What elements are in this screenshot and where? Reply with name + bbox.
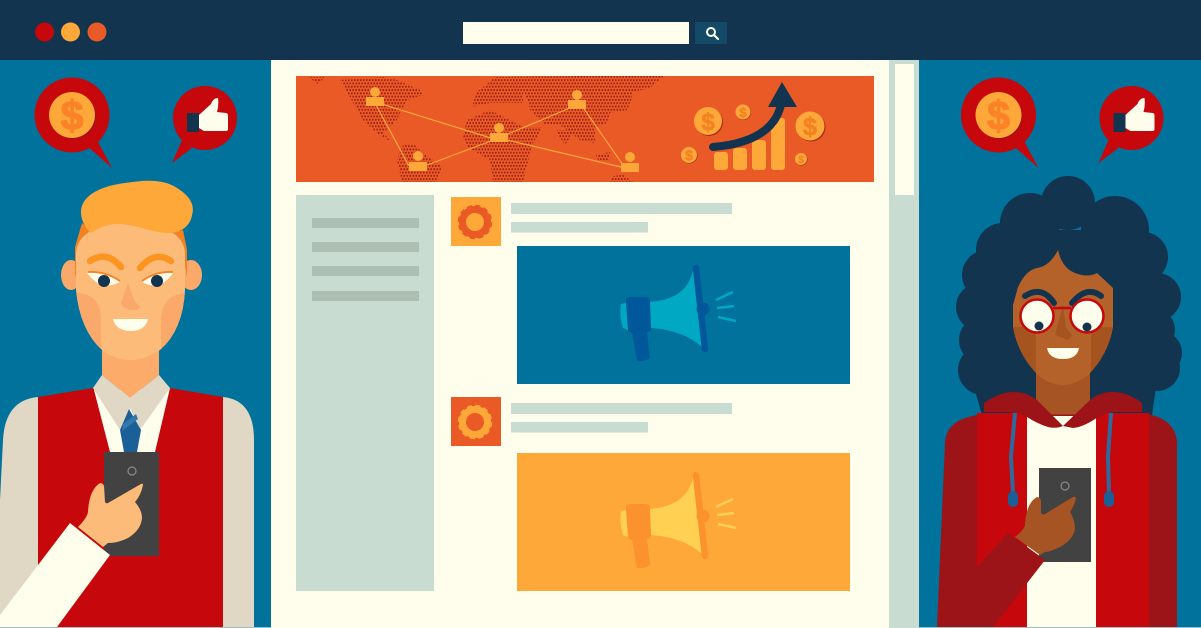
network people xyxy=(366,87,639,172)
white shirt front xyxy=(94,388,170,452)
banner: world network and growth xyxy=(296,75,874,182)
scrollbar xyxy=(889,60,919,628)
eyebrows xyxy=(1025,292,1101,303)
nose xyxy=(1055,305,1072,340)
dollar coins: $ xyxy=(701,109,715,136)
dollar bubble xyxy=(34,78,112,168)
dollar coins xyxy=(681,104,826,166)
post 1 image panel xyxy=(517,246,850,384)
dollar coins: $ xyxy=(685,147,693,163)
search field xyxy=(463,22,689,44)
neck xyxy=(102,345,159,398)
hand xyxy=(1015,497,1076,555)
growth bars xyxy=(714,118,785,170)
mouth xyxy=(113,319,148,331)
sidebar xyxy=(296,195,434,591)
dollar bubble xyxy=(961,78,1038,168)
dollar bubble: $ xyxy=(987,92,1010,138)
web page panel xyxy=(271,60,919,628)
dotted world map xyxy=(308,75,665,182)
nose xyxy=(121,283,140,310)
post 2 xyxy=(451,397,850,591)
window control dots xyxy=(35,22,106,42)
phone xyxy=(104,452,159,556)
drawstrings xyxy=(1008,413,1114,507)
woman character xyxy=(937,176,1182,627)
collar xyxy=(93,375,170,430)
ears xyxy=(61,260,202,290)
tie xyxy=(120,409,141,452)
hoodie body xyxy=(937,414,1177,627)
white t-shirt xyxy=(1027,416,1096,627)
mouth xyxy=(1047,348,1079,359)
browser top bar xyxy=(0,0,1201,60)
bottom edge line xyxy=(0,627,271,628)
post 2 image panel xyxy=(517,453,850,591)
glasses xyxy=(1020,300,1104,332)
dollar bubble: $ xyxy=(61,92,84,138)
sidebar menu lines xyxy=(312,218,419,301)
dollar coins: $ xyxy=(803,113,817,141)
side hair xyxy=(75,223,187,278)
search button xyxy=(695,22,727,44)
post 1 heading lines xyxy=(511,203,732,232)
icon: blue megaphone xyxy=(620,268,736,361)
left speech bubbles xyxy=(34,78,237,168)
hand xyxy=(78,483,143,547)
right speech bubbles xyxy=(961,78,1164,168)
growth arrow xyxy=(713,82,797,147)
dollar coins: $ xyxy=(739,105,747,120)
sleeve xyxy=(965,533,1045,627)
network lines xyxy=(375,103,623,167)
eyes xyxy=(87,272,173,287)
post 1 xyxy=(451,197,850,384)
sleeve xyxy=(0,523,110,627)
thumbs up bubble xyxy=(172,86,237,163)
hood xyxy=(984,392,1142,428)
shirt xyxy=(0,397,254,627)
post 2 avatar gear xyxy=(451,397,501,446)
phone xyxy=(1039,468,1091,562)
hair xyxy=(81,181,193,233)
post 1 avatar gear xyxy=(451,197,501,246)
red vest xyxy=(38,388,223,627)
face xyxy=(1010,250,1116,390)
man character xyxy=(0,181,254,627)
afro hair xyxy=(956,176,1182,420)
hoodie red panels xyxy=(977,413,1149,627)
post 2 heading lines xyxy=(511,403,732,432)
face xyxy=(76,224,185,360)
neck xyxy=(1036,360,1090,427)
bottom edge line right xyxy=(919,627,1201,628)
icon: yellow megaphone xyxy=(620,475,736,568)
dollar coins: $ xyxy=(798,155,804,166)
eyebrows xyxy=(90,257,171,268)
thumbs up bubble xyxy=(1098,86,1164,163)
